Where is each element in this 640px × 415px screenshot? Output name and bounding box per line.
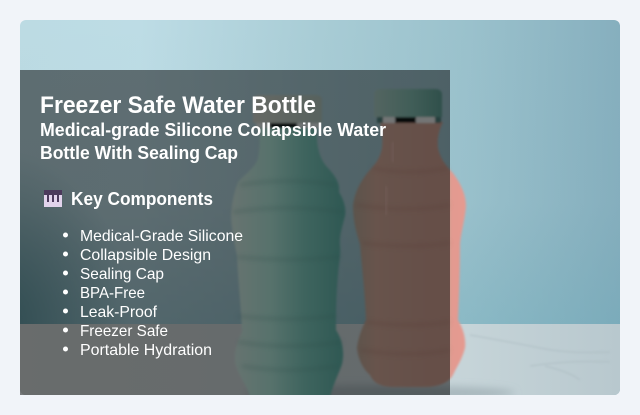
key components list: Leak-Proof: [80, 304, 158, 321]
key components list: Portable Hydration: [80, 342, 212, 359]
title: Freezer Safe Water Bottle: [40, 92, 316, 119]
key components list: [63, 228, 243, 359]
icon: piano keyboard: [44, 190, 62, 207]
key components list: Freezer Safe: [80, 323, 168, 340]
subtitle: Bottle With Sealing Cap: [40, 143, 238, 163]
pink bottle: [353, 89, 466, 387]
teal bottle: [231, 95, 345, 398]
dark text overlay panel: [20, 70, 450, 395]
key components list: Collapsible Design: [80, 247, 211, 264]
subtitle: [40, 120, 386, 163]
key components list: Medical-Grade Silicone: [80, 228, 243, 245]
key components list: BPA-Free: [80, 285, 145, 302]
table shadow: [331, 384, 512, 395]
subtitle: Medical-grade Silicone Collapsible Water: [40, 120, 386, 140]
section heading: key components: Key Components: [71, 189, 213, 209]
key components list: Sealing Cap: [80, 266, 164, 283]
